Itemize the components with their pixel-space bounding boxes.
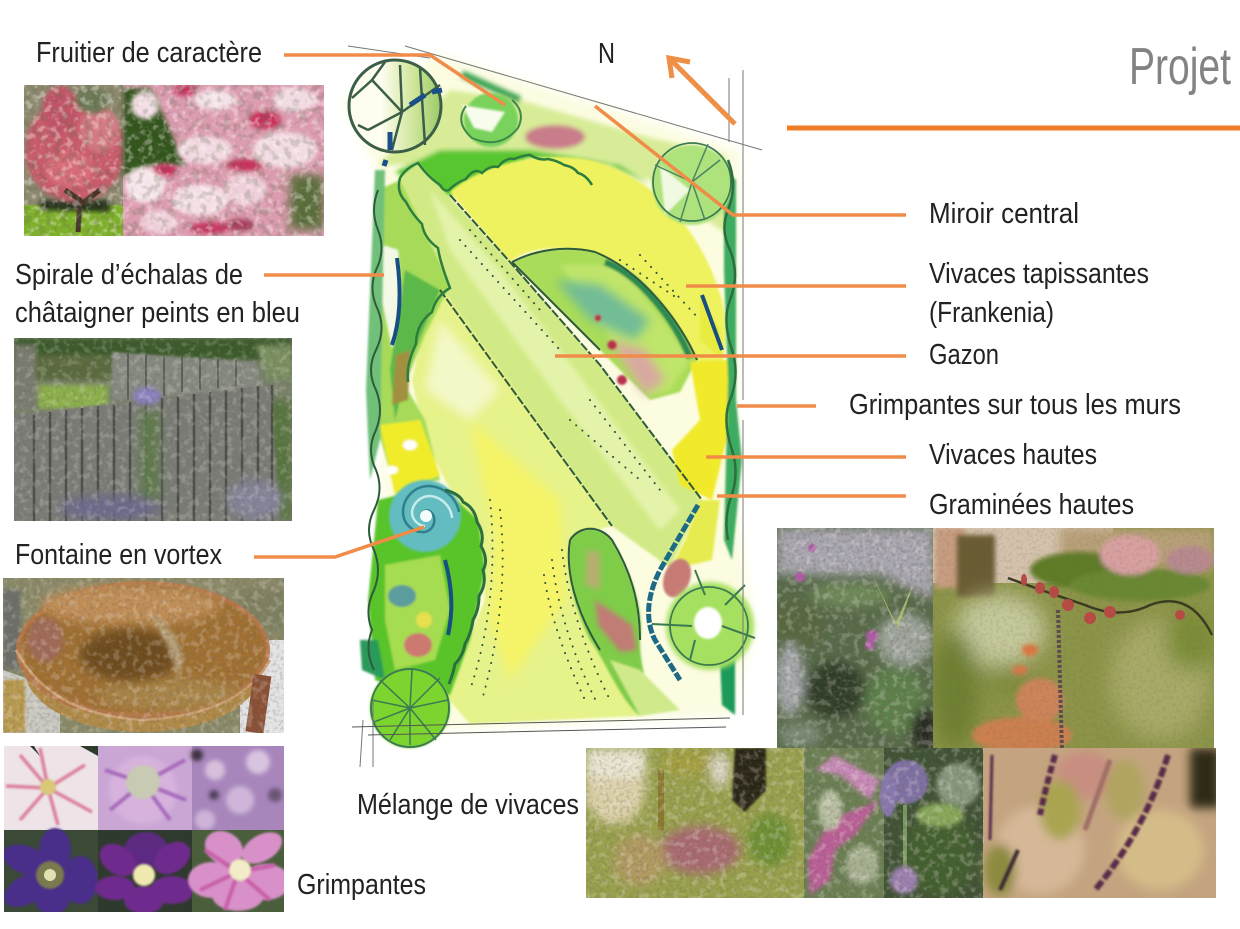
tree top middle bbox=[461, 93, 521, 147]
photo: perennial mix strip bbox=[586, 748, 1216, 898]
label: Vivaces hautes: Vivaces hautes bbox=[929, 439, 1097, 471]
vortex fountain drawing bbox=[389, 480, 461, 552]
left border bed bbox=[366, 170, 450, 495]
inner bed upper right bbox=[512, 249, 697, 400]
photo: copper vortex bowl bbox=[3, 578, 284, 733]
label: Fruitier de caractère: Fruitier de caractère bbox=[36, 37, 262, 69]
tree bottom right bbox=[652, 570, 755, 670]
stipple dots bbox=[460, 230, 700, 705]
label: Graminées hautes: Graminées hautes bbox=[929, 489, 1134, 521]
label: Mélange de vivaces: Mélange de vivaces bbox=[357, 789, 579, 821]
photo: chestnut paling fence bbox=[14, 338, 292, 521]
lower left bed bbox=[360, 485, 485, 695]
tree bottom left bbox=[370, 668, 450, 748]
clematis pink bbox=[188, 824, 290, 912]
property boundary lines bbox=[348, 46, 762, 767]
label: Fontaine en vortex bbox=[15, 527, 424, 571]
label: Fruitier de caractère bbox=[36, 37, 505, 105]
label: Vivaces tapissantes: Vivaces tapissantes bbox=[929, 258, 1149, 290]
label: Grimpantes: Grimpantes bbox=[297, 869, 426, 901]
label: Grimpantes sur tous les murs: Grimpantes sur tous les murs bbox=[849, 389, 1181, 421]
heading rule bbox=[787, 126, 1240, 130]
arrow: north bbox=[669, 58, 735, 124]
ink outlines bbox=[368, 155, 736, 684]
right border planting bbox=[658, 170, 742, 715]
trees bbox=[349, 60, 755, 748]
label: Miroir central: Miroir central bbox=[929, 198, 1079, 230]
diagonal lawn bbox=[398, 163, 702, 568]
clematis purple bbox=[94, 830, 196, 914]
label: Spirale d'échalas: Spirale d’échalas de bbox=[15, 259, 243, 291]
garden plan bbox=[342, 46, 762, 767]
photo: bleeding hearts border right bbox=[933, 528, 1214, 748]
clematis double lilac bbox=[98, 746, 192, 830]
yellow crescent bbox=[450, 157, 726, 375]
label: Spirale d'échalas bbox=[15, 259, 384, 329]
label: Spirale d'échalas: châtaigner peints en bleu bbox=[15, 297, 300, 329]
clematis small mauve bbox=[191, 746, 284, 830]
label: Vivaces tapissantes: (Frankenia) bbox=[929, 297, 1054, 329]
label: Vivaces tapissantes bbox=[686, 258, 1149, 329]
lower lawn bbox=[412, 292, 640, 724]
clematis white bbox=[4, 746, 98, 830]
north label: N bbox=[598, 38, 615, 70]
photo: crab apple tree and blossoms bbox=[24, 85, 324, 236]
middle bed bbox=[569, 529, 680, 716]
label: Miroir central bbox=[595, 106, 1079, 230]
photo: perennials border left bbox=[777, 528, 933, 748]
label: Fontaine en vortex: Fontaine en vortex bbox=[15, 539, 222, 571]
top border planting bbox=[378, 74, 735, 240]
clematis deep violet bbox=[0, 828, 98, 914]
label: Gazon: Gazon bbox=[929, 339, 999, 371]
photo: clematis grid bbox=[4, 746, 284, 912]
plan background wash bbox=[342, 55, 755, 730]
tree top right bbox=[652, 143, 732, 225]
tree top left bbox=[349, 60, 442, 166]
